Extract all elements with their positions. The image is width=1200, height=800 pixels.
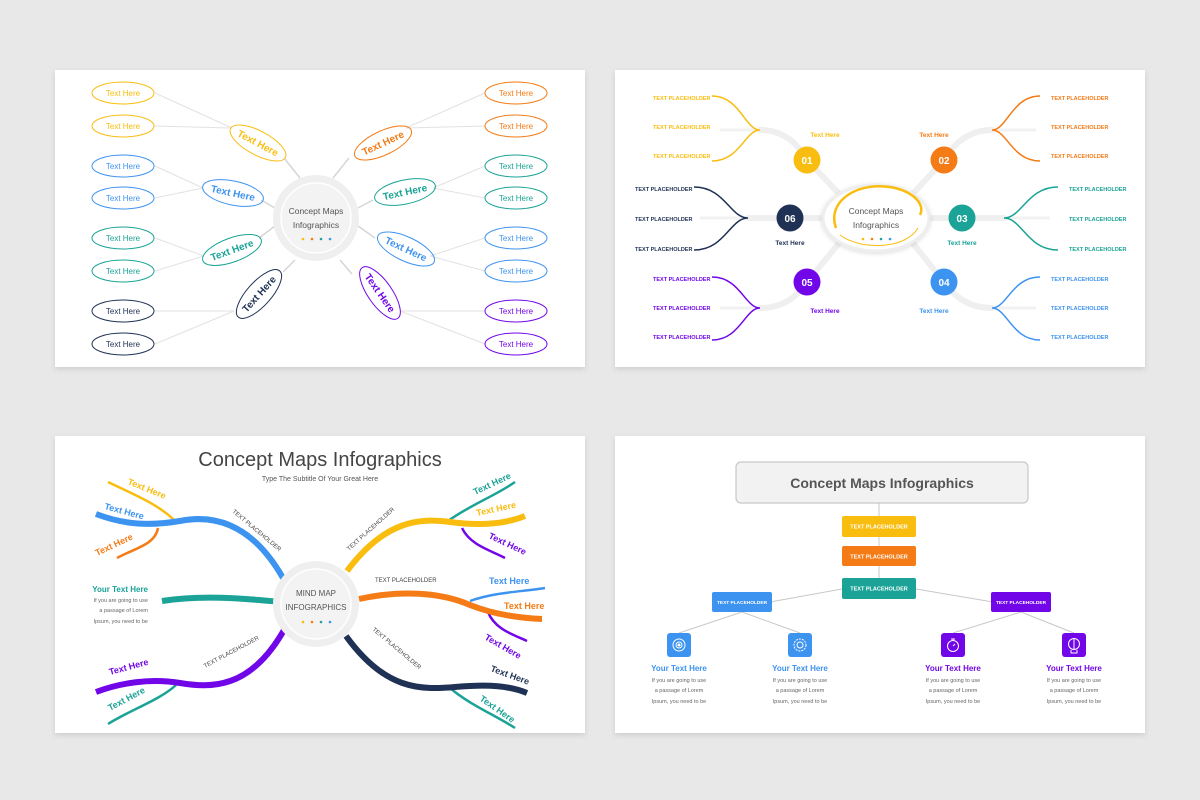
text here labels: Text Here: [483, 632, 523, 661]
middle rotated ovals: [199, 118, 439, 325]
numbered circles: 04: [938, 278, 950, 289]
numbered circles: 02: [938, 156, 950, 167]
icon captions: Your Text Here: [1046, 664, 1102, 673]
numbered circles: [776, 146, 976, 296]
text here labels: Text Here: [126, 477, 167, 501]
connectors: [679, 503, 1074, 633]
middle rotated ovals: Text Here: [241, 274, 279, 315]
icon captions: Your Text Here: [925, 664, 981, 673]
placeholder texts: TEXT PLACEHOLDER: [653, 154, 710, 160]
center ellipse: Concept Maps: [849, 206, 903, 216]
center circle: [273, 561, 359, 647]
right outer ovals: Text Here: [499, 307, 534, 316]
text block left: a passage of Lorem: [99, 608, 148, 614]
middle rotated ovals: Text Here: [361, 129, 406, 158]
placeholder texts: TEXT PLACEHOLDER: [1069, 187, 1126, 193]
middle rotated ovals: Text Here: [235, 129, 280, 159]
middle rotated ovals: Text Here: [210, 184, 256, 204]
ribbons left: [96, 482, 284, 724]
text here labels: Text Here: [103, 501, 145, 521]
icon captions: a passage of Lorem: [1050, 688, 1099, 694]
Text Here labels: Text Here: [810, 132, 840, 139]
placeholder labels: TEXT PLACEHOLDER: [371, 627, 422, 672]
text here labels: Text Here: [94, 532, 134, 558]
placeholder labels: TEXT PLACEHOLDER: [231, 509, 282, 554]
numbered circles: 06: [784, 214, 796, 225]
icon captions: If you are going to use: [1047, 678, 1101, 684]
Text Here labels: Text Here: [775, 240, 805, 247]
text here labels: Text Here: [106, 685, 147, 713]
colored boxes: TEXT PLACEHOLDER: [850, 524, 908, 530]
placeholder texts: TEXT PLACEHOLDER: [1069, 247, 1126, 253]
title box: Concept Maps Infographics: [790, 475, 974, 491]
center circle: Concept Maps: [289, 206, 343, 216]
middle rotated ovals: Text Here: [209, 238, 256, 264]
Text Here labels: Text Here: [919, 132, 949, 139]
placeholder texts: TEXT PLACEHOLDER: [653, 125, 710, 131]
left outer ovals: Text Here: [106, 340, 141, 349]
middle rotated ovals: Text Here: [382, 183, 429, 203]
placeholder labels: TEXT PLACEHOLDER: [346, 506, 397, 552]
right outer ovals: Text Here: [499, 234, 534, 243]
placeholder texts: TEXT PLACEHOLDER: [635, 187, 692, 193]
text here labels: Text Here: [504, 601, 544, 611]
left outer ovals: Text Here: [106, 307, 141, 316]
panel: radial oval mind map: [55, 70, 585, 367]
text here labels: Text Here: [489, 663, 531, 687]
ribbons right: [346, 482, 545, 728]
right outer ovals: Text Here: [499, 194, 534, 203]
numbered circles: 03: [956, 214, 968, 225]
center circle: Infographics: [293, 220, 339, 230]
center circle: [273, 175, 359, 261]
text here labels: [94, 471, 544, 725]
right outer ovals: Text Here: [499, 162, 534, 171]
center circle: MIND MAP: [296, 589, 336, 598]
numbered circles: 05: [801, 278, 813, 289]
text here labels: Text Here: [472, 471, 512, 497]
Text Here labels: [775, 132, 977, 315]
left outer ovals: Text Here: [106, 89, 141, 98]
icon captions: Your Text Here: [772, 664, 828, 673]
panel: hierarchy chart: [615, 436, 1145, 733]
placeholder labels: TEXT PLACEHOLDER: [375, 578, 437, 584]
icon captions: a passage of Lorem: [929, 688, 978, 694]
icon captions: Ipsum, you need to be: [773, 699, 827, 705]
title box: [736, 462, 1028, 503]
right outer ovals: Text Here: [499, 122, 534, 131]
right outer ovals: Text Here: [499, 89, 534, 98]
icon captions: Your Text Here: [651, 664, 707, 673]
placeholder labels: [203, 506, 437, 672]
placeholder texts: TEXT PLACEHOLDER: [653, 306, 710, 312]
placeholder texts: TEXT PLACEHOLDER: [1051, 277, 1108, 283]
icon captions: If you are going to use: [773, 678, 827, 684]
center ellipse: [823, 185, 929, 251]
subtitle: Type The Subtitle Of Your Great Here: [262, 476, 378, 483]
icon captions: If you are going to use: [926, 678, 980, 684]
text block left: Your Text Here: [92, 585, 149, 594]
text here labels: Text Here: [489, 576, 529, 586]
placeholder texts: TEXT PLACEHOLDER: [1069, 217, 1126, 223]
text here labels: Text Here: [478, 693, 517, 725]
text here labels: Text Here: [475, 500, 517, 518]
icon captions: Ipsum, you need to be: [926, 699, 980, 705]
right outer ovals: Text Here: [499, 340, 534, 349]
left outer ovals: Text Here: [106, 162, 141, 171]
left outer ovals: Text Here: [106, 267, 141, 276]
placeholder texts: TEXT PLACEHOLDER: [635, 247, 692, 253]
text block left: If you are going to use: [94, 598, 148, 604]
colored boxes: TEXT PLACEHOLDER: [850, 586, 908, 592]
middle rotated ovals: Text Here: [383, 235, 429, 265]
icon captions: Ipsum, you need to be: [652, 699, 706, 705]
middle rotated ovals: Text Here: [362, 272, 397, 315]
colored boxes: TEXT PLACEHOLDER: [717, 600, 768, 606]
title: Concept Maps Infographics: [198, 449, 442, 471]
placeholder texts: TEXT PLACEHOLDER: [1051, 154, 1108, 160]
panel: numbered concept map: [615, 70, 1145, 367]
text block left: Ipsum, you need to be: [94, 619, 148, 625]
icons: [667, 633, 1086, 657]
right outer ovals: [485, 82, 547, 355]
center ellipse: Infographics: [853, 220, 899, 230]
panel: mind map ribbons: [55, 436, 585, 733]
gray connectors: [748, 130, 1004, 308]
Text Here labels: Text Here: [919, 308, 949, 315]
Text Here labels: Text Here: [947, 240, 977, 247]
placeholder texts: TEXT PLACEHOLDER: [653, 96, 710, 102]
placeholder texts: TEXT PLACEHOLDER: [1051, 306, 1108, 312]
text here labels: Text Here: [487, 531, 528, 557]
branch curves: [694, 96, 1058, 340]
icon captions: a passage of Lorem: [776, 688, 825, 694]
placeholder texts: TEXT PLACEHOLDER: [1051, 335, 1108, 341]
colored boxes: [712, 516, 1051, 612]
text here labels: Text Here: [108, 657, 150, 677]
icon captions: a passage of Lorem: [655, 688, 704, 694]
left outer ovals: [92, 82, 154, 355]
placeholder texts: TEXT PLACEHOLDER: [653, 277, 710, 283]
left outer ovals: Text Here: [106, 234, 141, 243]
icon captions: Ipsum, you need to be: [1047, 699, 1101, 705]
Text Here labels: Text Here: [810, 308, 840, 315]
placeholder texts: TEXT PLACEHOLDER: [653, 335, 710, 341]
colored boxes: TEXT PLACEHOLDER: [996, 600, 1047, 606]
placeholder labels: TEXT PLACEHOLDER: [203, 635, 261, 670]
left outer ovals: Text Here: [106, 122, 141, 131]
colored boxes: TEXT PLACEHOLDER: [850, 554, 908, 560]
icon captions: [651, 664, 1102, 705]
placeholder texts: TEXT PLACEHOLDER: [1051, 96, 1108, 102]
center circle: INFOGRAPHICS: [286, 603, 346, 612]
text block left: [92, 585, 149, 625]
left outer ovals: Text Here: [106, 194, 141, 203]
placeholder texts: [635, 96, 1126, 341]
placeholder texts: TEXT PLACEHOLDER: [635, 217, 692, 223]
right outer ovals: Text Here: [499, 267, 534, 276]
icon captions: If you are going to use: [652, 678, 706, 684]
numbered circles: 01: [801, 156, 813, 167]
placeholder texts: TEXT PLACEHOLDER: [1051, 125, 1108, 131]
